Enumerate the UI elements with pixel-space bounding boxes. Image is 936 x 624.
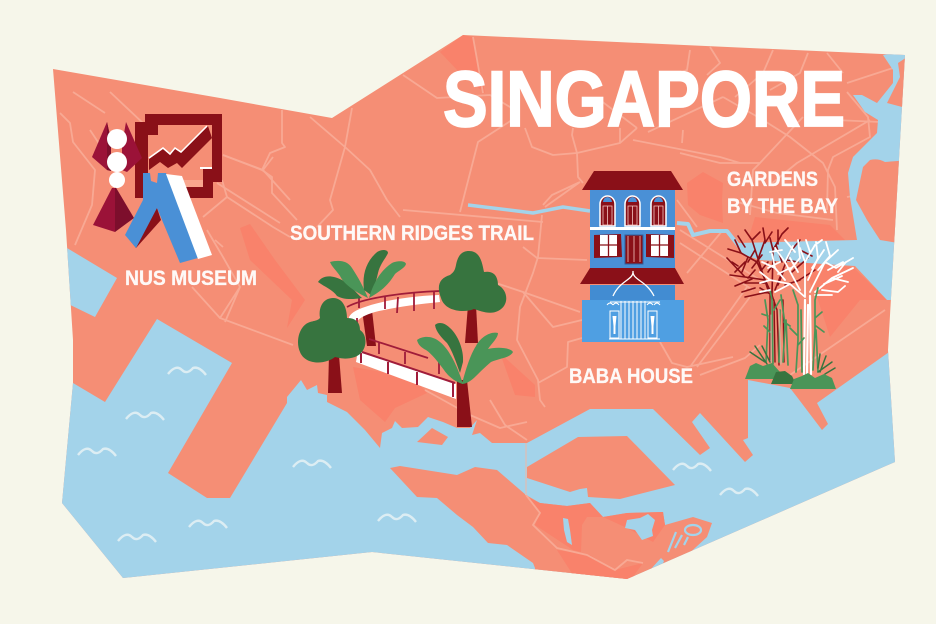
roof bbox=[582, 171, 683, 190]
southern island darker area bbox=[527, 497, 665, 552]
palm trunk bbox=[362, 310, 376, 346]
road network bbox=[60, 37, 897, 440]
arched windows bbox=[600, 196, 666, 226]
supertree: white bbox=[760, 240, 853, 374]
label: Baba House: BABA HOUSE bbox=[569, 365, 693, 388]
middle island bbox=[527, 436, 675, 499]
river bbox=[468, 205, 590, 213]
waves bbox=[78, 368, 758, 542]
upper storey wall bbox=[590, 190, 675, 268]
label: NUS Museum: NUS MUSEUM bbox=[125, 267, 257, 290]
zigzag chart line bbox=[149, 126, 212, 170]
label: Gardens by the Bay: GARDENS bbox=[727, 168, 818, 191]
sculpture: blue and white legs bbox=[125, 173, 212, 263]
icon: Southern Ridges bridge with trees bbox=[298, 250, 513, 427]
tree: left bbox=[298, 298, 365, 393]
lakes and inlets bbox=[563, 514, 664, 572]
palm: lower bbox=[417, 323, 513, 427]
inlets at the eastern tip bbox=[668, 525, 701, 552]
small islet bbox=[417, 428, 448, 445]
southern island bbox=[390, 466, 712, 590]
shuttered windows bbox=[594, 234, 674, 264]
title: SINGAPORE bbox=[443, 54, 845, 143]
north-east land bbox=[887, 58, 905, 107]
label: Gardens by the Bay: BY THE BAY bbox=[727, 195, 838, 218]
lower roof bbox=[580, 268, 684, 284]
palm: upper bbox=[318, 250, 406, 299]
tree: right bbox=[439, 251, 506, 343]
sculpture: crimson figure bbox=[92, 122, 142, 232]
label: Gardens by the Bay bbox=[727, 168, 838, 218]
east land bbox=[856, 159, 899, 242]
ground storey bbox=[590, 285, 675, 301]
picture frame bbox=[135, 114, 222, 198]
supertree: dark red bbox=[727, 228, 815, 365]
shrubs bbox=[745, 363, 783, 379]
frame window bbox=[148, 125, 212, 187]
water: west strait bbox=[67, 248, 117, 317]
icon: Baba House shophouse bbox=[580, 171, 684, 342]
icon: Gardens by the Bay supertrees bbox=[727, 228, 853, 389]
label: Southern Ridges Trail: SOUTHERN RIDGES TRAIL bbox=[290, 222, 534, 245]
icon: NUS Museum sculpture bbox=[92, 114, 222, 263]
bridge bbox=[347, 291, 456, 399]
shrub spikes bbox=[750, 346, 835, 374]
road on the island bbox=[526, 495, 643, 570]
parks and darker land bbox=[240, 35, 887, 422]
